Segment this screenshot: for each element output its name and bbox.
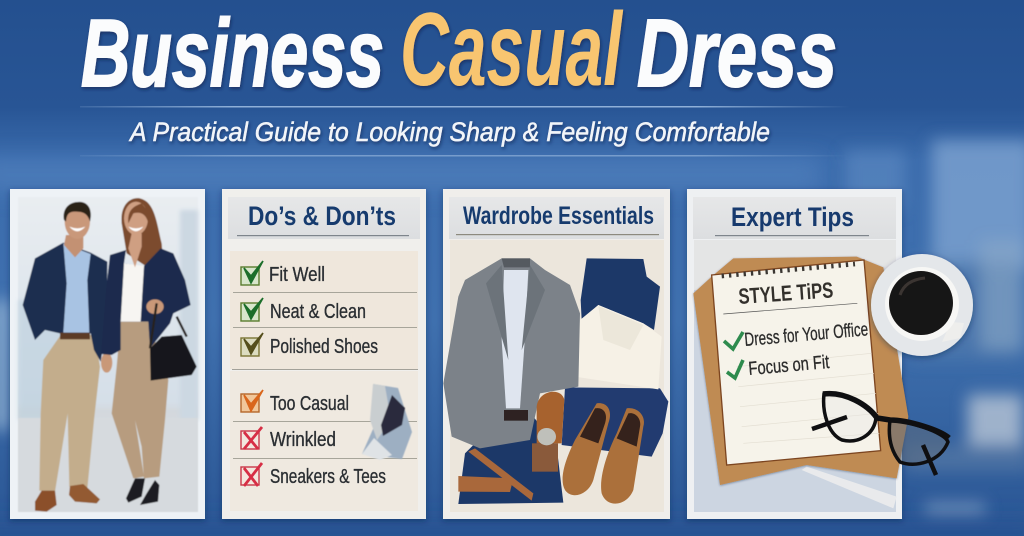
- item: Too Casual: Too Casual: [270, 393, 349, 415]
- panel heading band: [449, 197, 664, 239]
- heading: Expert Tips: Expert Tips: [731, 202, 854, 232]
- item: Wrinkled: Wrinkled: [270, 429, 336, 451]
- cross: Wrinkled: [241, 427, 262, 449]
- panel: expert tips: [687, 189, 973, 519]
- don't list: [230, 369, 418, 511]
- item: Fit Well: Fit Well: [269, 264, 325, 286]
- navy shorts and belt: [458, 413, 563, 504]
- panel: business casual couple photo: [10, 189, 205, 519]
- do list: [230, 251, 418, 369]
- title: [81, 0, 837, 108]
- man trousers: [39, 335, 100, 492]
- rule below subtitle: [80, 155, 850, 156]
- icon: coffee cup on saucer: [871, 254, 973, 356]
- item: Neat & Clean: Neat & Clean: [270, 301, 366, 323]
- subtitle: A Practical Guide to Looking Sharp & Feeling Comfortable: [128, 117, 770, 147]
- icon: tick two: [727, 360, 743, 378]
- title word: Business: Business: [81, 0, 384, 107]
- loose paper: [802, 467, 897, 508]
- heading: Do's & Don'ts: Do’s & Don’ts: [248, 201, 396, 231]
- woman hand left: [101, 353, 112, 373]
- white shirt: [575, 305, 662, 389]
- man neck and head: [64, 235, 83, 257]
- title word: Dress: Dress: [637, 0, 837, 107]
- heading: Wardrobe Essentials: Wardrobe Essentials: [463, 202, 654, 230]
- brown loafer and watch: [537, 392, 564, 443]
- woman top: [121, 263, 144, 322]
- panel: do's and don'ts: [222, 189, 426, 519]
- woman hair back: [121, 198, 163, 267]
- note heading: STYLE TIPS: STYLE TiPS: [738, 277, 834, 309]
- check: Neat & Clean: [241, 298, 263, 321]
- cross: Sneakers & Tees: [241, 463, 262, 486]
- spiral binding: [722, 264, 855, 276]
- woman: [101, 198, 197, 505]
- navy trousers: [581, 258, 660, 330]
- brown oxford shoes: [563, 403, 610, 495]
- man shirt: [63, 243, 91, 333]
- icon: folded casual clothes: [362, 384, 412, 460]
- icon: eyeglasses: [812, 394, 949, 475]
- panel: wardrobe essentials: [443, 189, 670, 519]
- tip: Focus on Fit: Focus on Fit: [748, 352, 831, 380]
- check: Too Casual: [241, 390, 263, 412]
- woman heels: [126, 478, 145, 503]
- check: Fit Well: [241, 261, 263, 285]
- panel heading band: [693, 197, 896, 239]
- icon: tick one: [724, 332, 743, 349]
- woman face: [128, 233, 142, 267]
- woman hand: [146, 299, 164, 314]
- notepad: [712, 260, 881, 465]
- man blazer: [23, 243, 107, 362]
- tip: Dress for Your Office: Dress for Your Office: [744, 319, 869, 351]
- rule above subtitle: [80, 106, 850, 108]
- woman blazer: [101, 248, 191, 355]
- manila folder: [693, 257, 908, 485]
- woman trousers: [112, 322, 168, 478]
- panel heading band: [228, 197, 420, 239]
- grey blazer: [443, 258, 580, 448]
- man belt: [60, 333, 90, 339]
- check: Polished Shoes: [241, 333, 263, 356]
- item: Polished Shoes: Polished Shoes: [270, 336, 378, 358]
- handbag: [150, 335, 197, 381]
- item: Sneakers & Tees: Sneakers & Tees: [270, 466, 386, 488]
- man: [23, 202, 107, 512]
- man shoes: [35, 491, 57, 512]
